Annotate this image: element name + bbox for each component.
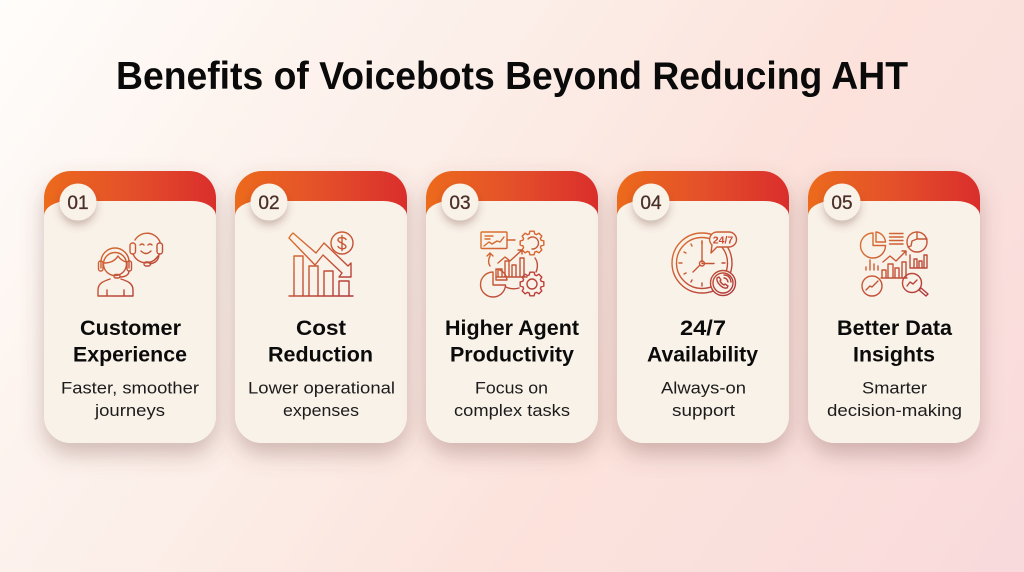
number badge 05: [824, 184, 860, 220]
heading: Reduction: [268, 344, 373, 366]
number badge 01: 01: [67, 193, 89, 214]
icon: agent and smiling customer: [98, 233, 162, 296]
number badge 05: 05: [831, 193, 853, 214]
description: support: [672, 402, 735, 420]
description: Lower operational: [248, 380, 395, 398]
icon: data insights charts and magnifier: [860, 232, 928, 296]
icon: falling cost chart with dollar coin: [289, 232, 353, 296]
panel: higher agent productivity: [426, 171, 598, 443]
heading: Better Data: [837, 317, 952, 340]
icon: clock with 24/7 bubble and phone: 24/7: [713, 234, 733, 246]
description: expenses: [283, 402, 359, 420]
number badge 01: [60, 184, 96, 220]
description: Smarter: [862, 380, 928, 398]
description: Faster, smoother: [61, 380, 200, 398]
description: decision-making: [827, 402, 962, 420]
description: Focus on: [475, 380, 548, 398]
panel: better data insights: [808, 171, 980, 443]
number badge 02: 02: [258, 193, 280, 214]
description: journeys: [94, 402, 165, 420]
description: complex tasks: [454, 402, 570, 420]
description: [61, 380, 200, 420]
heading: Availability: [647, 344, 758, 366]
heading: [268, 317, 373, 366]
number badge 03: 03: [449, 193, 471, 214]
panel: customer experience: [44, 171, 216, 443]
panel: 24/7 availability: [617, 171, 789, 443]
number badge 04: [632, 184, 670, 220]
heading: Customer: [80, 317, 181, 340]
heading: 24/7: [680, 317, 726, 340]
number badge 04: 04: [640, 193, 662, 214]
heading: Higher Agent: [445, 317, 579, 340]
description: [827, 380, 962, 420]
description: [661, 380, 746, 420]
heading: Cost: [296, 317, 346, 340]
icon: clock with 24/7 bubble and phone: [672, 232, 737, 296]
description: [248, 380, 395, 420]
heading: [73, 317, 187, 366]
description: Always-on: [661, 380, 746, 398]
heading: Experience: [73, 344, 187, 366]
icon: productivity charts and gears: [481, 231, 544, 297]
heading: [837, 317, 952, 366]
panel: cost reduction: [235, 171, 407, 443]
heading: [445, 317, 579, 366]
heading: [647, 317, 758, 366]
number badge 02: [250, 184, 288, 220]
description: [454, 380, 570, 420]
number badge 03: [442, 184, 478, 220]
title: Benefits of Voicebots Beyond Reducing AHT: [116, 55, 908, 98]
heading: Insights: [853, 344, 935, 366]
heading: Productivity: [450, 344, 574, 366]
